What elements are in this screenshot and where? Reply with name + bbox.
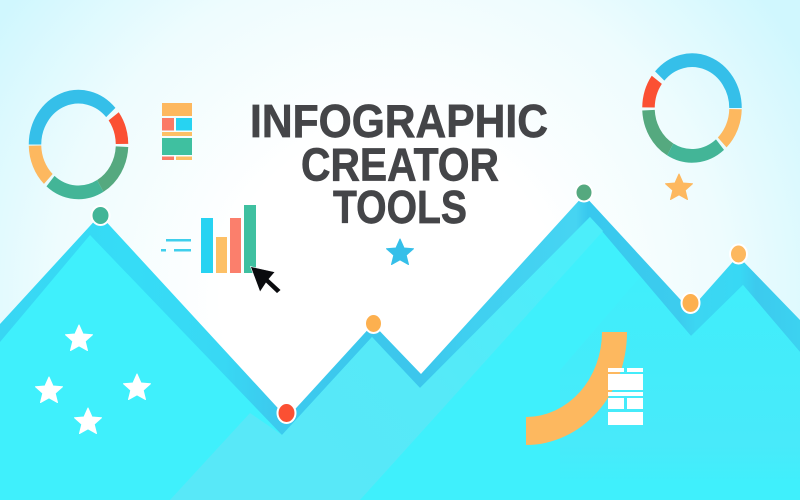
- marker: orange far right peak: [730, 244, 747, 264]
- blue segment: [35, 97, 111, 144]
- star: orange: [666, 174, 692, 200]
- marker: orange right valley: [682, 293, 700, 313]
- layout template icon: [162, 103, 192, 160]
- title line 3: TOOLS: [333, 181, 467, 233]
- orange segment: [35, 146, 48, 179]
- mountain range: [0, 195, 800, 500]
- light green segment: [670, 145, 720, 156]
- star: center blue: [386, 239, 414, 264]
- marker: red valley: [278, 403, 296, 423]
- mountain outer band: [0, 195, 800, 500]
- lighter diagonal facet: [170, 217, 603, 500]
- orange segment: [722, 109, 736, 142]
- white stars group: [36, 325, 150, 434]
- light green segment: [50, 181, 100, 192]
- title: [250, 95, 548, 233]
- cursor arrow: [250, 266, 281, 294]
- marker: green left peak: [92, 206, 110, 225]
- red segment: [648, 80, 657, 107]
- white brick layout icon: [608, 368, 643, 425]
- orange curved arc: [526, 332, 627, 445]
- dark green segment: [648, 110, 670, 149]
- mountain inner fill: [0, 217, 800, 500]
- marker: green right peak: [576, 184, 592, 202]
- right donut chart: [648, 60, 736, 156]
- title line 2: CREATOR: [301, 138, 499, 190]
- title line 1: INFOGRAPHIC: [250, 95, 548, 147]
- bar chart icon: [161, 205, 256, 273]
- left donut chart: [35, 97, 122, 192]
- right mountain tint: [560, 277, 800, 480]
- blue segment: [660, 60, 736, 108]
- red segment: [114, 116, 122, 144]
- marker: orange middle peak: [365, 314, 382, 333]
- dark green segment: [100, 147, 122, 186]
- peak markers: [92, 184, 747, 423]
